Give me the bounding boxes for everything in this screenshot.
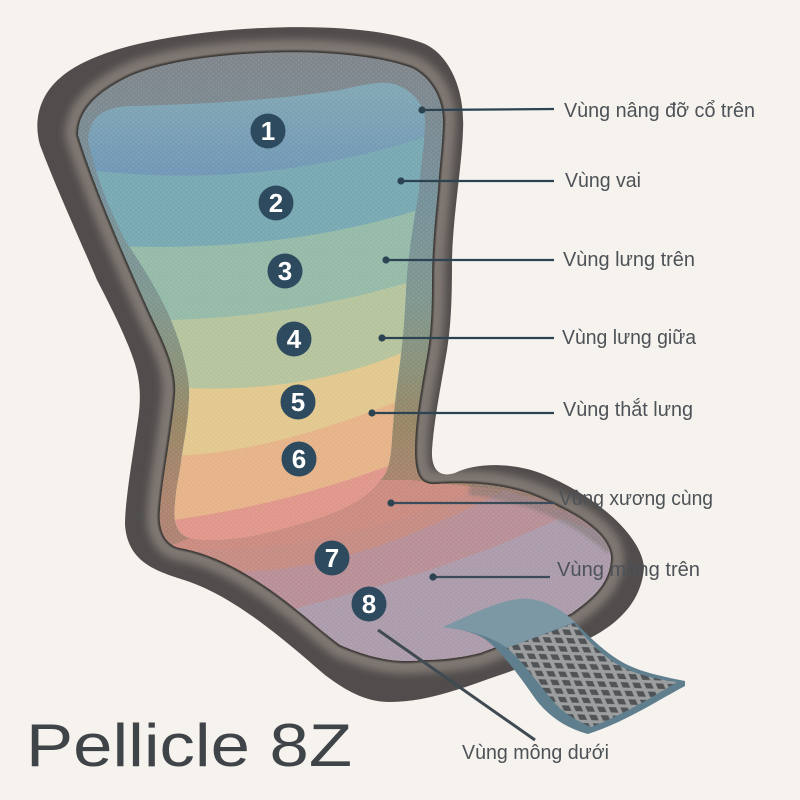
- marker 5: [280, 384, 316, 420]
- mesh sample swatch: [443, 599, 690, 740]
- marker 1: 1: [261, 116, 275, 146]
- leader line: sacrum: [387, 499, 554, 507]
- marker 4: 4: [287, 324, 302, 354]
- leader line: upper back: [382, 256, 554, 264]
- marker 6: 6: [292, 444, 306, 474]
- gutter zones: [78, 52, 611, 661]
- leader line: lower glute: [378, 630, 535, 740]
- label: mid back: Vùng lưng giữa: [562, 327, 697, 349]
- marker 8: [352, 586, 386, 622]
- leader line: lumbar: [368, 409, 554, 417]
- leader line: shoulder: [397, 177, 554, 185]
- label: upper neck: Vùng nâng đỡ cổ trên: [564, 100, 755, 122]
- marker 8: 8: [362, 589, 376, 619]
- label: sacrum: Vùng xương cùng: [559, 488, 713, 510]
- label: lower glute: Vùng mông dưới: [462, 742, 609, 764]
- leader line: mid back: [378, 334, 554, 342]
- mesh weave texture: [78, 53, 611, 661]
- mesh panel with coloured zones: [78, 52, 611, 661]
- marker 2: 2: [269, 188, 283, 218]
- marker 1: [250, 114, 286, 148]
- leader line: upper neck: [418, 106, 554, 114]
- label: lumbar: Vùng thắt lưng: [563, 398, 693, 421]
- seat bands: [172, 480, 611, 661]
- marker 4: [276, 322, 312, 356]
- marker 2: [258, 186, 294, 220]
- label: upper back: Vùng lưng trên: [563, 249, 695, 271]
- title: Pellicle 8Z: [26, 712, 352, 779]
- leader line: upper glute: [429, 573, 550, 581]
- label: upper glute: Vùng mông trên: [557, 559, 700, 581]
- marker 5: 5: [291, 387, 305, 417]
- colour bands upper back: [88, 82, 426, 540]
- marker 3: [268, 254, 302, 288]
- marker 7: 7: [325, 543, 339, 573]
- label: shoulder: Vùng vai: [565, 170, 641, 192]
- marker 6: [282, 442, 316, 476]
- seat frame: [37, 27, 644, 702]
- marker 7: [314, 540, 350, 576]
- marker 3: 3: [278, 256, 292, 286]
